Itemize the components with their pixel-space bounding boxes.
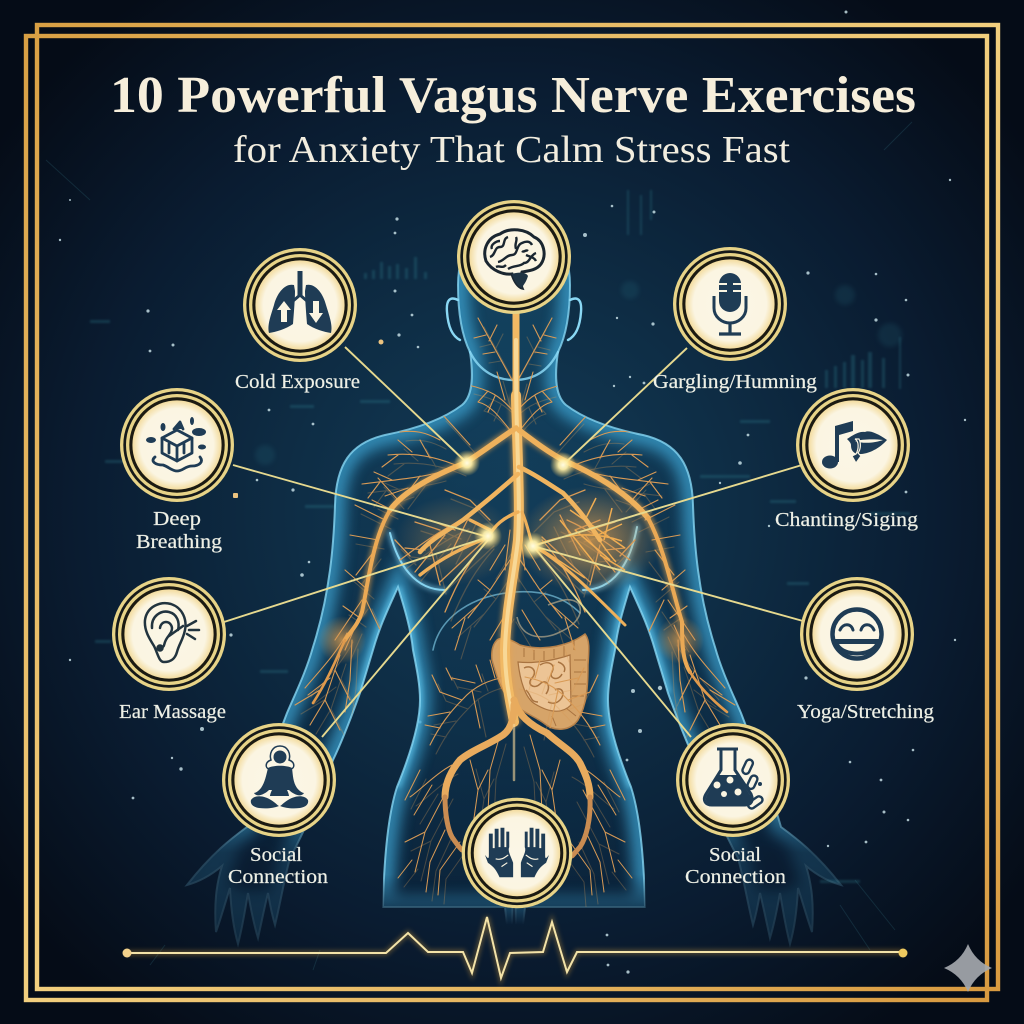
badge: music and lips (796, 388, 910, 502)
badge: flask (676, 723, 790, 837)
icon: brain (485, 230, 544, 288)
stomach outline (517, 600, 580, 637)
label: Deep Breathing: Deep (153, 508, 201, 530)
glowing nerve nodes (454, 450, 576, 560)
label: Ear Massage: Ear Massage (119, 701, 226, 723)
label: Chanting/Siging: Chanting/Siging (775, 509, 918, 531)
icon: ear massage (145, 603, 199, 662)
human body silhouette (187, 212, 841, 944)
label: Social Connection (right): Social (709, 844, 761, 866)
shoulder and arm branches (390, 428, 516, 510)
head, ears and chest contours (390, 298, 637, 650)
subtitle: for Anxiety That Calm Stress Fast (233, 129, 790, 171)
label: Social Connection (left): Connection (228, 866, 328, 888)
second tier branches (420, 474, 518, 552)
body outline (187, 212, 841, 944)
icon: lungs (268, 271, 332, 333)
label: Deep Breathing: Breathing (136, 531, 222, 553)
label: Social Connection (left): Social (250, 844, 302, 866)
icon: flask with molecules (704, 749, 764, 810)
badge: ear (112, 577, 226, 691)
icon: melting ice cube (146, 417, 206, 471)
main trunk (512, 305, 520, 400)
intestines (492, 634, 589, 729)
vagus nerve fine branches (295, 318, 735, 907)
connector lines (224, 347, 803, 737)
body edge glow (187, 212, 841, 944)
badge: laughing face (800, 577, 914, 691)
warm glow around chest (318, 486, 704, 664)
title: 10 Powerful Vagus Nerve Exercises (110, 67, 916, 124)
label: Yoga/Stretching: Yoga/Stretching (797, 701, 934, 723)
pulse end dots (122, 948, 132, 958)
vagus nerve main trunk and branches (313, 305, 727, 856)
label: Social Connection (right): Connection (685, 866, 786, 888)
sparkle watermark (944, 944, 992, 992)
icon: microphone (714, 273, 746, 334)
badge: brain (457, 200, 571, 314)
badge: microphone (673, 247, 787, 361)
label: Cold Exposure: Cold Exposure (235, 371, 360, 393)
lower loops (445, 705, 514, 797)
icon: meditating figure (251, 746, 308, 808)
badge: open hands (462, 798, 572, 908)
heartbeat pulse line (122, 917, 908, 978)
label: Gargling/Humning: Gargling/Humning (653, 371, 817, 393)
badge: meditation (222, 723, 336, 837)
icon: open hands (485, 828, 549, 877)
icon: music note and lips (822, 421, 887, 468)
icon: laughing face (831, 610, 883, 658)
badge: ice cube (120, 388, 234, 502)
badge: lungs (243, 248, 357, 362)
